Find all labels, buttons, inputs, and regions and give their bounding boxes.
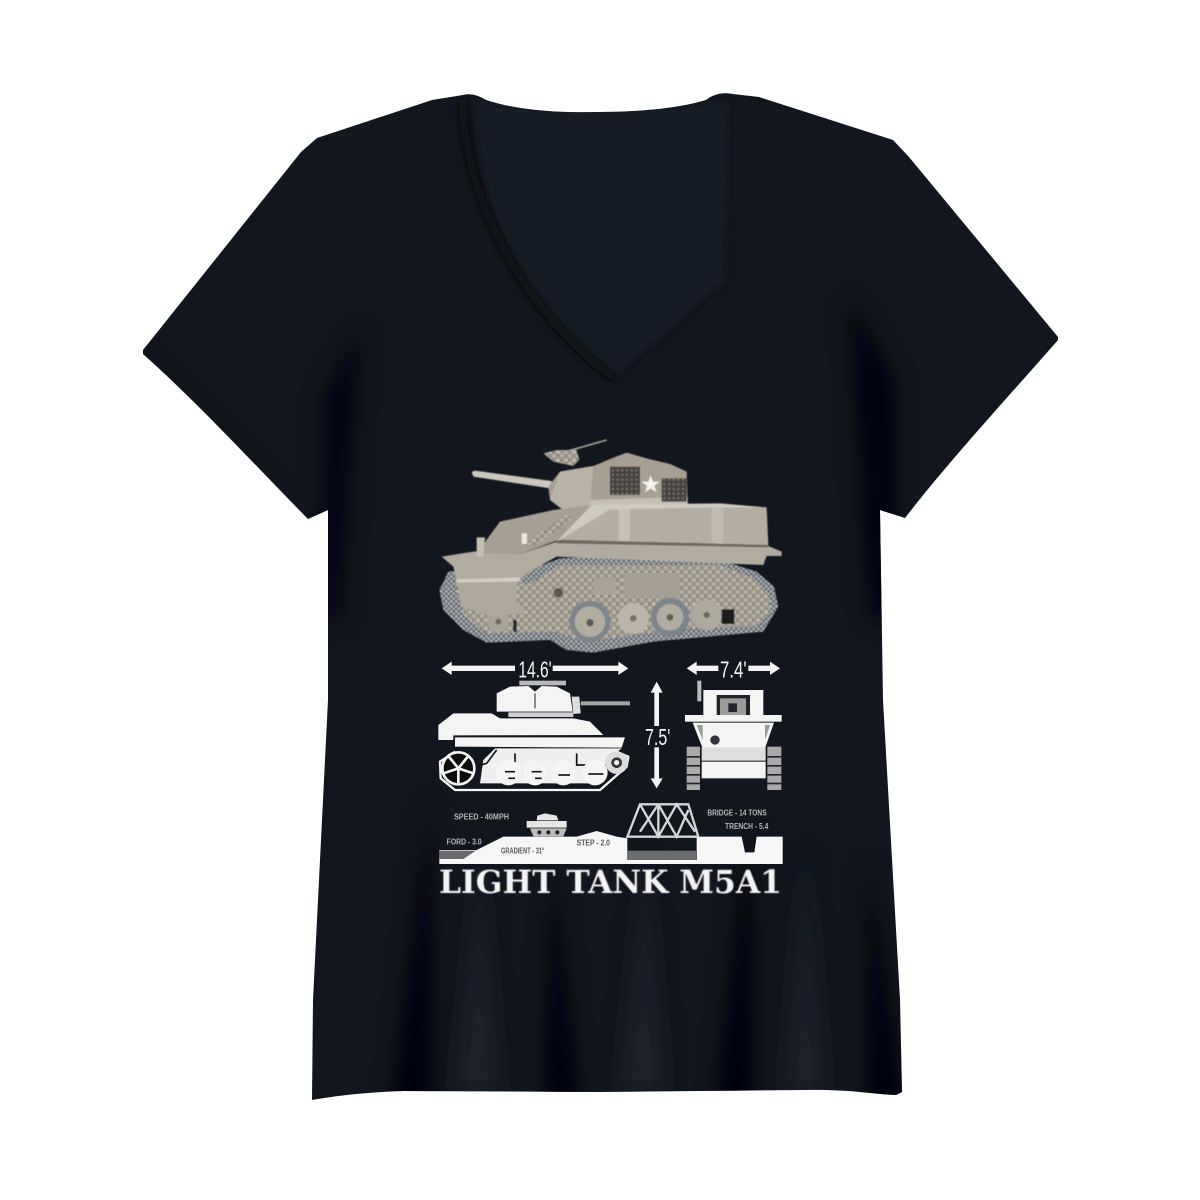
specification labels: GRADIENT - 31°	[501, 847, 544, 856]
white star	[641, 475, 660, 492]
small tank on terrain	[527, 813, 567, 836]
suspension side panel	[455, 565, 768, 642]
length arrow 14.6 ft: 14.6'	[518, 656, 552, 682]
turret	[548, 453, 688, 510]
side view suspension	[480, 748, 622, 783]
specification labels: TRENCH - 5.4	[725, 822, 769, 831]
river water band	[627, 851, 696, 860]
anti-aircraft machine gun	[543, 440, 607, 466]
turret stowage mesh	[610, 467, 640, 495]
terrain performance diagram	[439, 804, 783, 864]
t-shirt body	[100, 93, 1058, 1110]
side view track	[440, 752, 628, 790]
specification labels	[447, 809, 769, 856]
specification labels: BRIDGE - 14 TONS	[707, 809, 767, 818]
t-shirt infographic	[143, 93, 1058, 1100]
width arrow 7.4 ft: 7.4'	[720, 656, 747, 682]
neck opening panel	[475, 100, 728, 378]
tracks	[439, 555, 778, 653]
height arrow 7.5 ft	[645, 682, 670, 788]
dimension and side view drawings	[438, 656, 782, 790]
upper hull	[553, 503, 768, 545]
white terrain profile	[439, 831, 783, 864]
front view tank	[685, 681, 782, 790]
specification labels: SPEED - 40MPH	[454, 813, 509, 822]
body fold highlights	[450, 936, 822, 1092]
glacis plate	[477, 505, 592, 557]
side view tank	[438, 681, 630, 790]
specification labels: STEP - 2.0	[577, 839, 610, 848]
title: LIGHT TANK M5A1	[439, 863, 782, 901]
main tank illustration	[439, 440, 782, 653]
gun barrel	[472, 471, 552, 489]
body fold shadows	[100, 300, 905, 1110]
collar fold shadow	[463, 100, 613, 378]
specification labels: FORD - 3.0	[447, 837, 482, 846]
lower hull and fender	[442, 540, 782, 583]
front hull	[457, 578, 526, 616]
length arrow 14.6 ft	[442, 656, 628, 682]
bridge truss	[627, 804, 698, 837]
road wheels	[488, 570, 771, 642]
height arrow 7.5 ft: 7.5'	[645, 724, 670, 750]
width arrow 7.4 ft	[687, 656, 780, 682]
ford water band	[439, 851, 476, 859]
